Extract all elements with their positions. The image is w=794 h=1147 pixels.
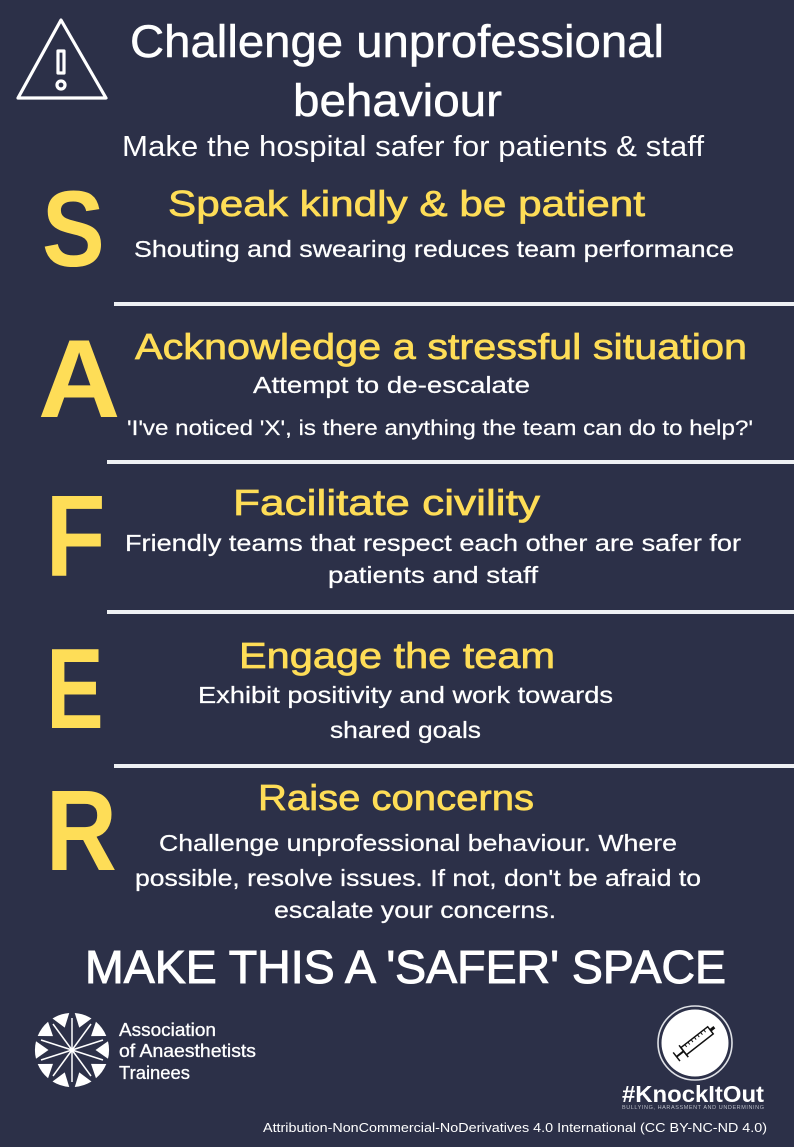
text: challenge: possible, resolve issues. If not, don't be afraid to [135, 865, 701, 891]
logo text: Association [119, 1020, 216, 1040]
subtitle: Make the hospital safer for patients & staff [122, 131, 705, 163]
text: example phrase: 'I've noticed 'X', is there anything the team can do to help?' [127, 417, 753, 440]
title: Challenge unprofessional [130, 16, 664, 67]
tagline: BULLYING, HARASSMENT AND UNDERMINING [622, 1105, 764, 1111]
panel: F [46, 471, 741, 601]
heading: speak kindly: Speak kindly & be patient [168, 183, 645, 224]
icon: starburst [35, 1012, 109, 1088]
text: friendly teams: Friendly teams that respect each other are safer for [125, 530, 741, 556]
title: behaviour [293, 75, 502, 126]
text: positivity: shared goals [330, 717, 481, 743]
icon: syringe badge [658, 1006, 732, 1080]
panel: E [46, 626, 613, 753]
text: positivity [198, 682, 613, 743]
panel: R [46, 766, 701, 923]
logo text [119, 1020, 256, 1083]
letter R: R [46, 766, 117, 895]
letter F: F [46, 471, 105, 601]
icon: warning triangle [18, 20, 106, 98]
heading: engage: Engage the team [239, 635, 555, 676]
text: positivity: Exhibit positivity and work towards [198, 682, 613, 708]
heading: raise concerns: Raise concerns [258, 777, 534, 818]
letter E: E [46, 626, 104, 753]
hashtag: #KnockItOut [622, 1081, 764, 1107]
title [130, 16, 664, 126]
heading: acknowledge: Acknowledge a stressful situation [135, 326, 747, 367]
heading: facilitate: Facilitate civility [233, 482, 540, 523]
text: shouting: Shouting and swearing reduces team performance [134, 236, 734, 262]
logo text: of Anaesthetists [119, 1041, 256, 1061]
text: challenge: Challenge unprofessional behaviour. Where [159, 830, 677, 856]
attribution: Attribution-NonCommercial-NoDerivatives 4.0 International (CC BY-NC-ND 4.0) [263, 1120, 767, 1135]
letter S: S [42, 169, 105, 289]
logo text: Trainees [119, 1063, 190, 1083]
call to action: MAKE THIS A 'SAFER' SPACE [85, 941, 726, 993]
text: challenge: escalate your concerns. [274, 897, 556, 923]
text: friendly teams: patients and staff [328, 562, 539, 588]
panel: S [42, 169, 734, 289]
logo: KnockItOut [622, 1006, 764, 1111]
letter A: A [38, 316, 120, 441]
text: challenge [135, 830, 701, 923]
logo: Association of Anaesthetists Trainees [35, 1012, 256, 1088]
text: friendly teams [125, 530, 741, 588]
text: de-escalate: Attempt to de-escalate [253, 372, 530, 398]
panel: A [38, 316, 753, 441]
